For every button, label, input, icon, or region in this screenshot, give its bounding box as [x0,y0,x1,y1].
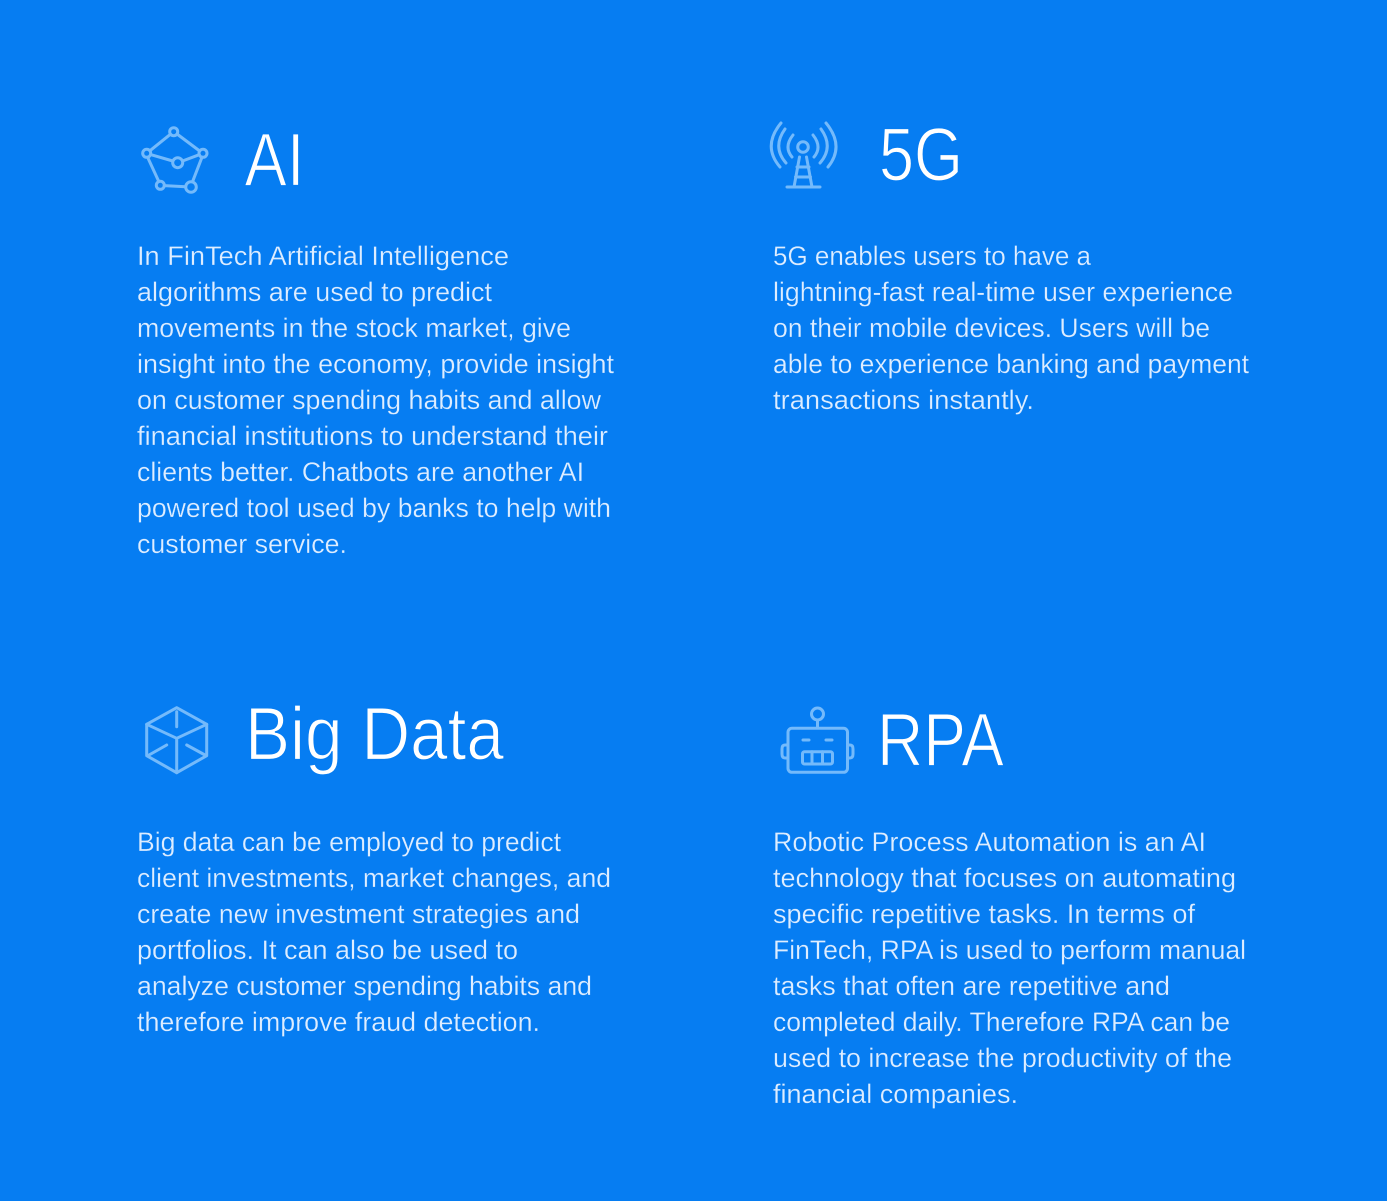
panel: RPA [773,698,1246,1109]
heading: 5G: 5G [879,112,963,196]
text: 5G description: able to experience banking and payment [773,349,1249,379]
text: Big Data description [137,827,611,1037]
panel: 5G [771,112,1249,415]
text: 5G description [773,241,1249,415]
text: Big Data description: Big data can be employed to predict [137,827,561,857]
text: Big Data description: analyze customer spending habits and [137,971,592,1001]
text: 5G description: lightning-fast real-time user experience [773,277,1233,307]
text: AI description: clients better. Chatbots are another AI [137,457,584,487]
icon: RPA robot [782,708,853,772]
text: AI description: financial institutions to understand their [137,421,608,451]
text: RPA description: technology that focuses on automating [773,863,1236,893]
heading: RPA: RPA [877,698,1004,782]
text: AI description: In FinTech Artificial Intelligence [137,241,509,271]
text: RPA description [773,827,1246,1109]
panel: Big Data [137,692,611,1037]
text: AI description [137,241,614,559]
text: AI description: on customer spending habits and allow [137,385,601,415]
panel: AI [137,118,614,559]
text: RPA description: completed daily. Therefore RPA can be [773,1007,1230,1037]
text: RPA description: financial companies. [773,1079,1018,1109]
icon: 5G antenna tower [771,123,836,187]
text: RPA description: tasks that often are repetitive and [773,971,1170,1001]
text: RPA description: specific repetitive tasks. In terms of [773,899,1195,929]
text: Big Data description: therefore improve fraud detection. [137,1007,540,1037]
text: AI description: powered tool used by banks to help with [137,493,611,523]
text: Big Data description: portfolios. It can also be used to [137,935,518,965]
text: RPA description: used to increase the productivity of the [773,1043,1232,1073]
text: RPA description: Robotic Process Automation is an AI [773,827,1206,857]
text: AI description: customer service. [137,529,347,559]
text: Big Data description: create new investment strategies and [137,899,580,929]
heading: Big Data: Big Data [245,692,504,776]
heading: AI: AI [244,118,304,202]
text: RPA description: FinTech, RPA is used to perform manual [773,935,1246,965]
icon: AI network [143,128,207,192]
text: AI description: insight into the economy, provide insight [137,349,614,379]
text: 5G description: on their mobile devices. Users will be [773,313,1210,343]
text: 5G description: transactions instantly. [773,385,1034,415]
text: AI description: movements in the stock market, give [137,313,571,343]
text: 5G description: 5G enables users to have a [773,241,1092,271]
text: AI description: algorithms are used to predict [137,277,492,307]
text: Big Data description: client investments, market changes, and [137,863,611,893]
icon: Big Data cube [147,708,207,773]
